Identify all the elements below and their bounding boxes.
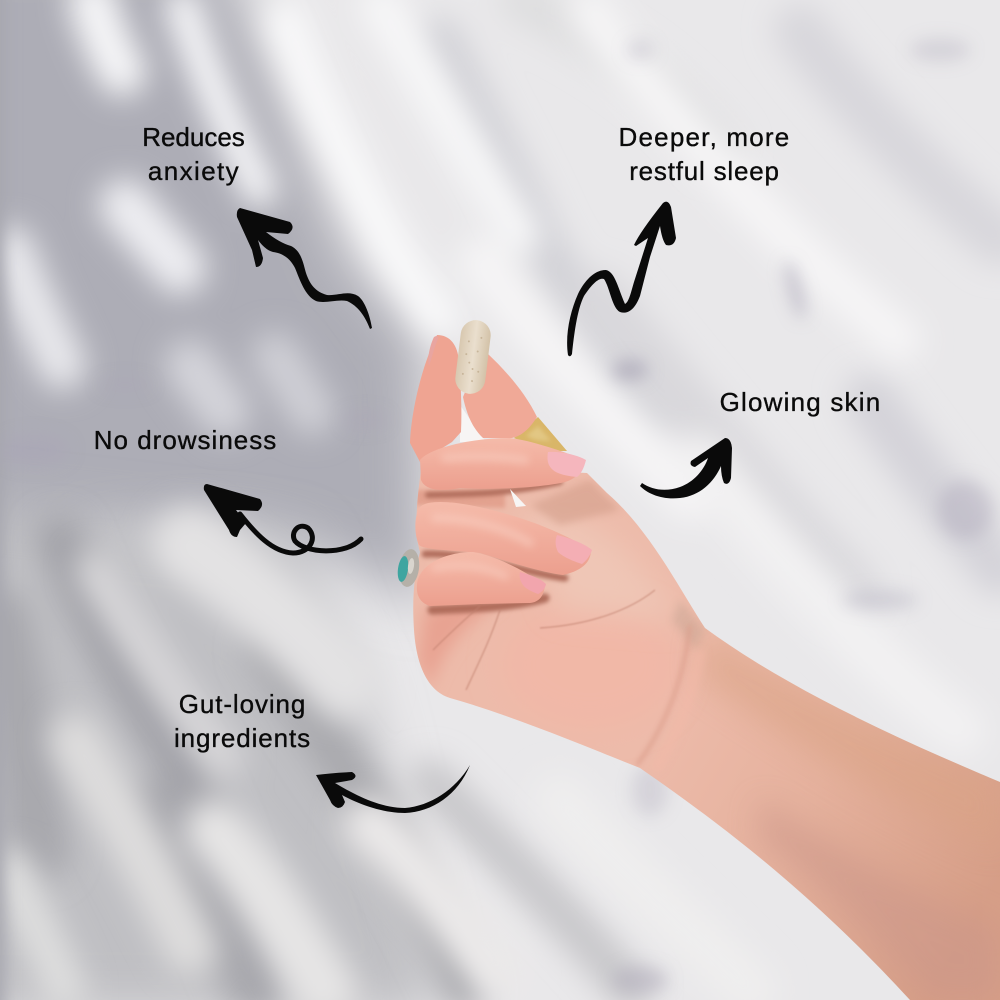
ring finger	[415, 502, 591, 575]
hand shading	[415, 480, 1000, 1000]
white gap between thumb and finger	[460, 405, 486, 442]
fingernails	[428, 336, 592, 594]
arrow: deeper sleep	[567, 202, 676, 356]
white gap under index finger	[510, 489, 526, 507]
label: gut-loving ingredients: ingredients	[174, 723, 311, 753]
left edge shadow	[0, 0, 4, 1000]
thumb	[463, 353, 537, 438]
gold softgel capsule	[514, 417, 567, 451]
pointing finger	[410, 335, 461, 462]
arrow: no drowsiness	[204, 484, 361, 553]
finger highlights	[435, 457, 530, 576]
hand and forearm	[396, 318, 1000, 1000]
label: gut-loving ingredients: Gut-loving	[179, 689, 306, 719]
label: deeper, more restful sleep: Deeper, more	[619, 122, 790, 152]
palm creases	[433, 590, 655, 690]
label: glowing skin: Glowing skin	[720, 387, 881, 417]
label: deeper, more restful sleep: restful sleep	[629, 156, 780, 186]
dark bands	[60, 540, 260, 990]
label: no drowsiness: No drowsiness	[94, 425, 277, 455]
forearm and palm	[413, 470, 1000, 1000]
label: reduces anxiety: anxiety	[148, 156, 240, 186]
label: reduces anxiety: Reduces	[142, 122, 245, 152]
index finger	[420, 438, 585, 490]
arrow: glowing skin	[640, 438, 732, 498]
little finger	[417, 552, 545, 606]
arrow: reduces anxiety	[237, 208, 372, 329]
turquoise ring	[396, 548, 422, 588]
white capsule	[454, 318, 492, 396]
shadows under fingers	[425, 482, 565, 610]
arrow: gut-loving ingredients	[316, 765, 470, 813]
